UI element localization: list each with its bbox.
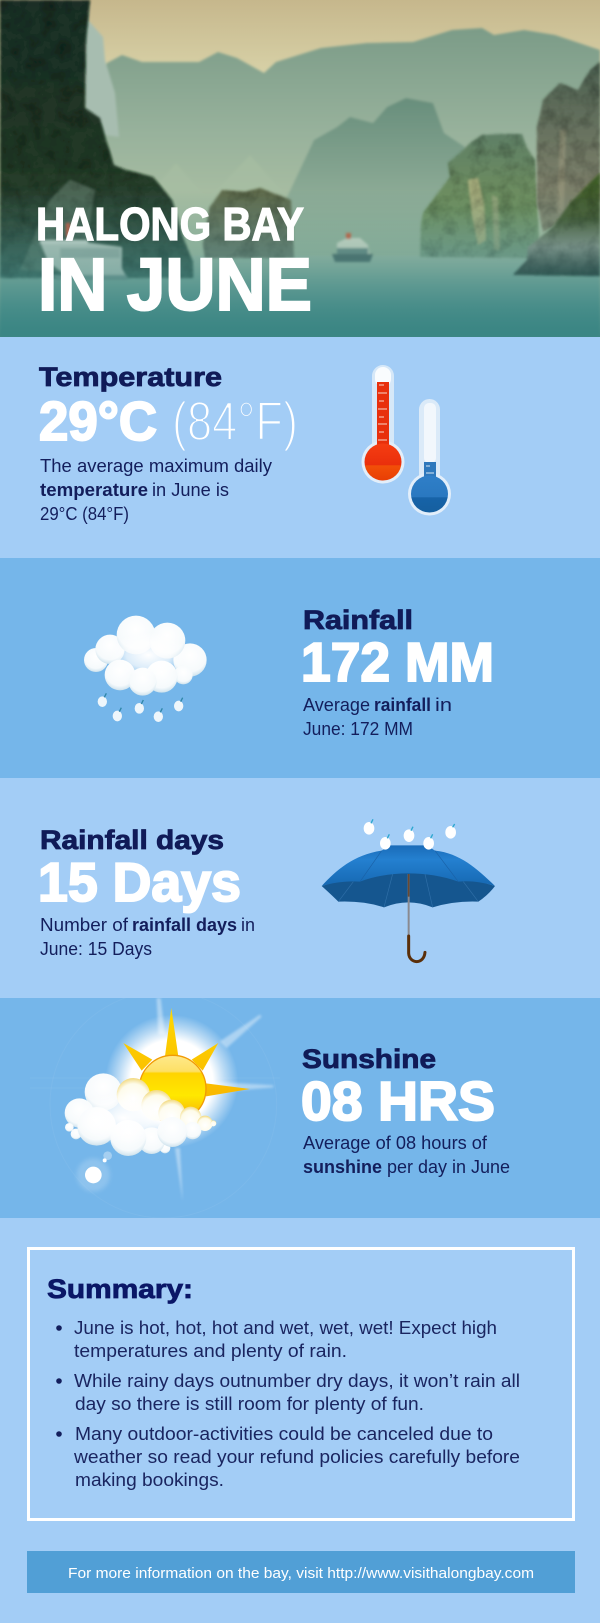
bullet 3: making bookings. — [75, 1469, 224, 1490]
faint lens rings — [50, 1078, 274, 1088]
rainfall days description: Number of — [40, 915, 129, 935]
panel: sunshine — [0, 991, 600, 1218]
title line 1: HALONG BAY — [36, 198, 304, 250]
right foreground rock — [513, 173, 600, 276]
value: 08 HRS: 08 HRS — [301, 1070, 495, 1132]
footer bar — [27, 1551, 575, 1593]
icon: sun behind cloud — [50, 998, 276, 1196]
icon: thermometers — [362, 365, 451, 516]
temperature description: temperature — [40, 480, 148, 500]
rainfall days description: in — [241, 915, 255, 935]
umbrella handle — [409, 936, 425, 962]
right tall cliff — [537, 62, 600, 232]
left white boat — [40, 223, 127, 280]
sunshine description: per day in June — [387, 1157, 510, 1177]
panel: rainfall — [0, 558, 600, 778]
left dark cliff — [0, 0, 193, 278]
sunlit cloud — [65, 1073, 216, 1156]
title line 2: IN JUNE — [38, 243, 312, 326]
bullet 3: weather so read your refund policies carefully before — [73, 1446, 520, 1467]
rainfall days description: rainfall days — [132, 915, 237, 935]
panel: rainfall days — [0, 778, 600, 998]
light beams — [157, 998, 273, 1201]
rain drops — [98, 693, 183, 722]
temperature description: in June is — [152, 480, 229, 500]
rainfall description: rainfall — [374, 695, 431, 715]
red thermometer — [362, 365, 404, 484]
heading: rainfall days: Rainfall days — [40, 825, 224, 855]
bullet 2: day so there is still room for plenty of fun. — [75, 1393, 424, 1414]
icon: umbrella — [322, 819, 495, 962]
small misty peak — [150, 155, 290, 262]
rainfall description — [303, 695, 452, 739]
bullet 1: June is hot, hot, hot and wet, wet, wet! Expect high — [74, 1317, 497, 1338]
sun glow — [105, 1015, 238, 1148]
pale cliff strip — [84, 20, 119, 137]
water drops — [364, 819, 456, 850]
value: 15 Days: 15 Days — [38, 851, 241, 913]
centre rock islet — [203, 188, 294, 258]
bullet 3 — [56, 1423, 520, 1490]
temperature description — [40, 456, 272, 524]
water — [0, 256, 600, 337]
right limestone island — [420, 134, 540, 258]
bullet 1: temperatures and plenty of rain. — [74, 1340, 347, 1361]
umbrella underside — [322, 860, 495, 907]
rainfall description: Average — [303, 695, 370, 715]
heading: temperature: Temperature — [39, 362, 222, 392]
sunshine description: Average of 08 hours of — [303, 1133, 488, 1153]
bullet 2: While rainy days outnumber dry days, it won’t rain all — [74, 1370, 520, 1391]
panel: temperature — [0, 337, 600, 558]
umbrella shaft — [406, 874, 412, 936]
sun rays — [123, 1008, 250, 1096]
value: 84°F: (84°F) — [172, 390, 298, 452]
bullet 2 — [56, 1370, 520, 1414]
rainfall description: June: 172 MM — [303, 719, 413, 739]
far misty mountain ridge — [104, 26, 600, 236]
umbrella canopy — [322, 845, 495, 886]
heading: rainfall: Rainfall — [303, 605, 413, 635]
sun disc — [139, 1055, 206, 1122]
hero: Halong Bay photo scene — [0, 0, 600, 337]
centre boat — [332, 233, 373, 262]
blue thermometer — [408, 399, 451, 516]
sunshine description — [303, 1133, 510, 1177]
bullet 1 — [56, 1317, 497, 1361]
value: 172 MM: 172 MM — [301, 631, 494, 693]
temperature description: 29°C (84°F) — [40, 504, 129, 524]
heading: summary: Summary: — [47, 1274, 193, 1304]
lens flare dots — [77, 1151, 112, 1192]
value: 29°C: 29°C — [39, 390, 157, 452]
footer bar: For more information on the bay, visit http://www.visithalongbay.com — [68, 1565, 534, 1582]
rainfall description: in — [435, 695, 452, 715]
rainfall days description — [40, 915, 255, 959]
teal bottom fade — [0, 205, 600, 337]
heading: sunshine: Sunshine — [302, 1044, 436, 1074]
rainfall days description: June: 15 Days — [40, 939, 152, 959]
panel: summary — [28, 1248, 574, 1520]
bullet 3: Many outdoor-activities could be canceled due to — [75, 1423, 493, 1444]
temperature description: The average maximum daily — [40, 456, 272, 476]
icon: rain cloud — [84, 616, 207, 722]
central mountain — [280, 98, 470, 262]
sunshine description: sunshine — [303, 1157, 382, 1177]
title — [38, 206, 310, 312]
